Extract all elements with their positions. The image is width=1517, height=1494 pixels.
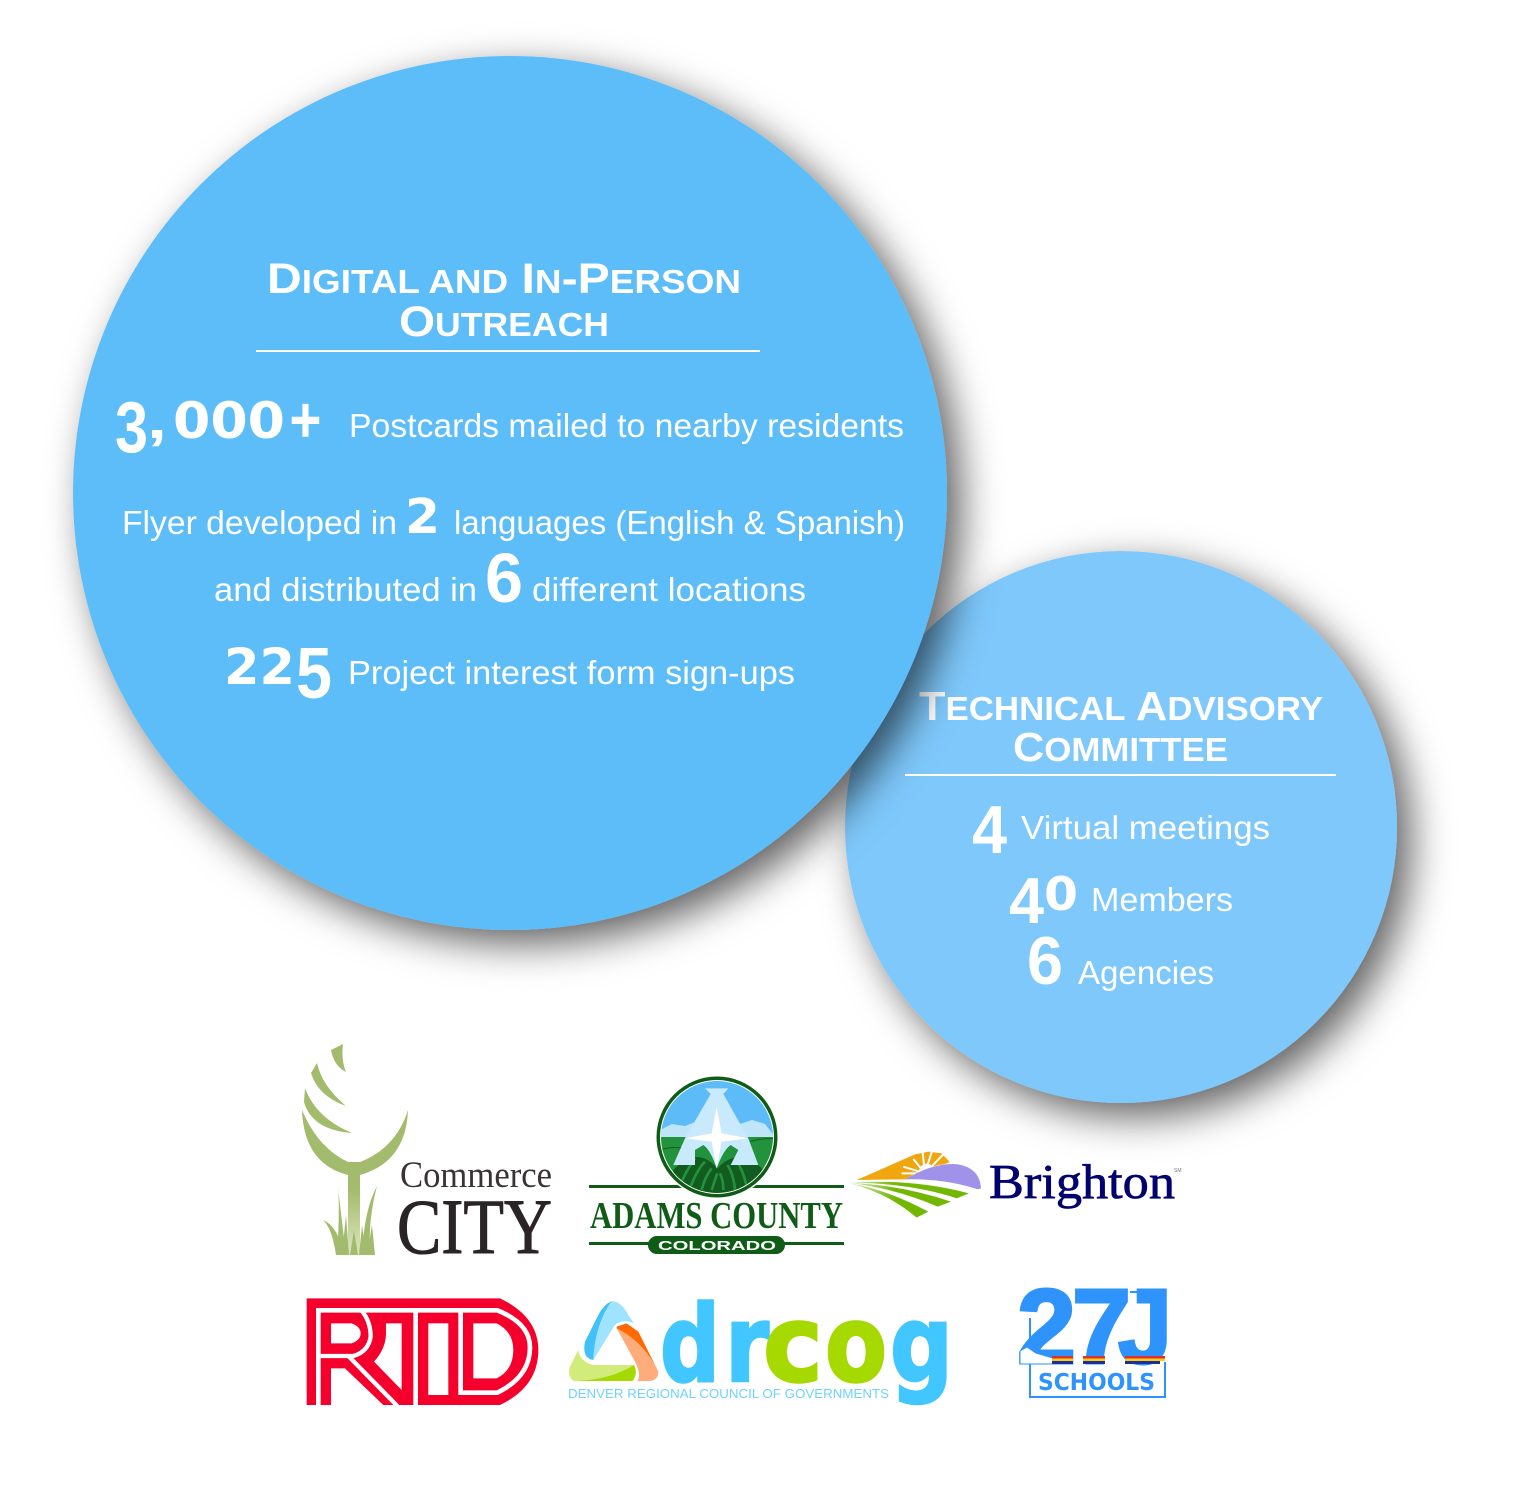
stat: virtual meetings	[972, 792, 1270, 868]
panel: digital and in-person outreach	[73, 56, 947, 930]
stat: flyer languages	[122, 489, 905, 545]
logo: Brighton: Brighton	[989, 1154, 1175, 1209]
stat: postcards mailed: +	[288, 390, 323, 448]
stat: virtual meetings: 4	[972, 792, 1007, 868]
stat: interest form sign-ups: Project interest form sign-ups	[348, 654, 795, 691]
stat: postcards mailed: ,	[147, 390, 167, 450]
panel: technical advisory committee	[845, 551, 1397, 1103]
stat: distribution locations: 6	[485, 539, 523, 617]
logo: DRCOG	[568, 1283, 953, 1406]
logo: Brighton: SM	[1174, 1168, 1182, 1174]
logo: DRCOG: o	[825, 1283, 887, 1406]
logo: Brighton	[850, 1150, 1182, 1218]
logo: DRCOG: DENVER REGIONAL COUNCIL OF GOVERNMENTS	[568, 1386, 889, 1401]
logo: DRCOG: d	[660, 1283, 720, 1406]
logo: Commerce City: Commerce	[400, 1155, 552, 1196]
stat: distribution locations: and distributed in	[214, 571, 477, 608]
logo: DRCOG: r	[725, 1283, 769, 1406]
logo: DRCOG: c	[763, 1283, 823, 1406]
stat: flyer languages: languages (English & Spanish)	[454, 504, 905, 541]
stat: agencies: 6	[1027, 923, 1063, 999]
logo: 27J Schools	[1017, 1268, 1172, 1397]
heading: technical advisory committee: TECHNICAL ADVISORY	[919, 683, 1323, 729]
logo: Commerce City	[302, 1044, 552, 1270]
circle: committee background	[845, 551, 1397, 1103]
circle: outreach background	[73, 56, 947, 930]
stat: members: 4	[1009, 864, 1044, 937]
stat: members: Members	[1091, 881, 1233, 918]
heading: digital and in-person outreach	[256, 255, 760, 352]
stat: agencies	[1027, 923, 1214, 999]
heading: technical advisory committee: COMMITTEE	[1013, 724, 1228, 770]
stat: postcards mailed: 3	[115, 388, 148, 468]
stat: members	[1009, 864, 1233, 937]
stat: interest form sign-ups	[224, 634, 795, 714]
heading: technical advisory committee	[905, 683, 1336, 776]
heading: digital and in-person outreach: DIGITAL AND IN-PERSON	[267, 255, 741, 303]
stat: postcards mailed: Postcards mailed to nearby residents	[349, 407, 904, 444]
logo: Adams County	[589, 1075, 844, 1254]
logo: Adams County: ADAMS COUNTY	[590, 1195, 843, 1237]
stat: postcards mailed: 000	[173, 392, 285, 450]
stat: interest form sign-ups: 5	[296, 634, 332, 714]
logo: Adams County: COLORADO	[658, 1238, 776, 1253]
logo: 27J Schools: 7	[1072, 1268, 1131, 1386]
heading: digital and in-person outreach: OUTREACH	[399, 298, 609, 346]
stat: interest form sign-ups: 22	[224, 638, 295, 696]
logo: 27J Schools: J	[1118, 1268, 1172, 1386]
stat: distribution locations: different locations	[532, 571, 806, 608]
logo: 27J Schools: SCHOOLS	[1038, 1370, 1155, 1396]
logo: 27J Schools: 2	[1017, 1268, 1076, 1386]
stat: flyer languages: 2	[405, 489, 440, 545]
logo: Commerce City: CITY	[397, 1183, 552, 1270]
stat: flyer languages: Flyer developed in	[122, 504, 397, 541]
stat: members: 0	[1044, 867, 1078, 921]
stat: postcards mailed	[115, 388, 904, 468]
logo: RTD	[307, 1298, 538, 1406]
stat: agencies: Agencies	[1078, 954, 1214, 991]
stat: virtual meetings: Virtual meetings	[1021, 809, 1270, 846]
logo: DRCOG: g	[890, 1283, 953, 1406]
stat: distribution locations	[214, 539, 806, 617]
